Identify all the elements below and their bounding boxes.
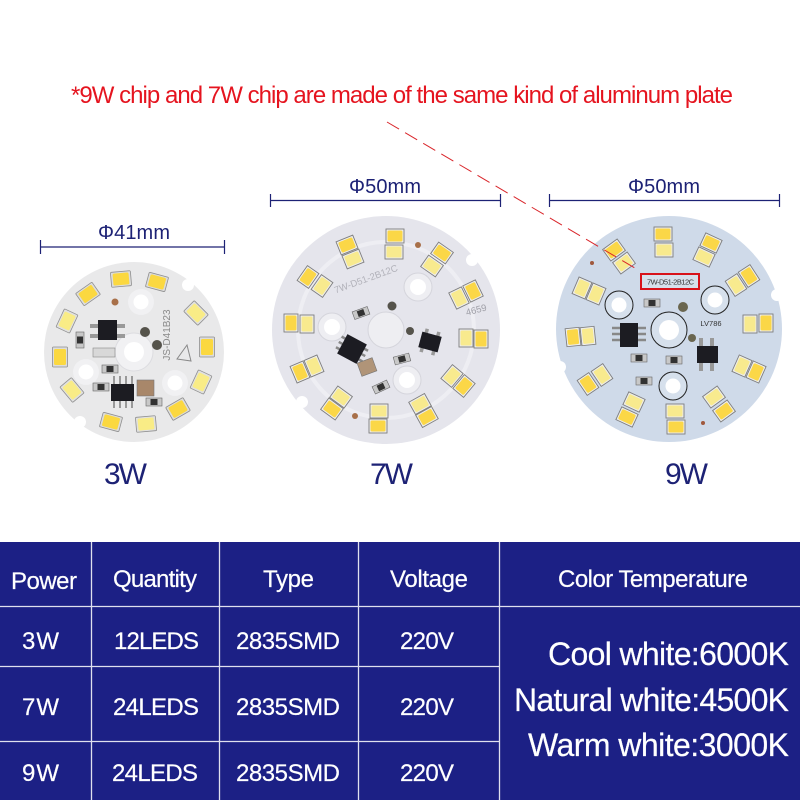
table row: 3W: 12LEDS	[114, 628, 199, 655]
dimension: 7W diameter	[270, 176, 500, 207]
dimension: 9W diameter: Φ50mm	[628, 176, 700, 198]
board: 3W: JS-D41B23	[162, 309, 173, 361]
board: 7W: 4659	[465, 303, 488, 319]
label: 9W: 9W	[665, 458, 709, 491]
table row: 7W: 2835SMD	[236, 694, 340, 721]
table row: 9W: 24LEDS	[112, 760, 198, 787]
callout: dashed leader line	[387, 122, 640, 271]
table row: 7W: 7W	[22, 694, 59, 721]
board: 9W: LV786	[700, 319, 722, 328]
table row: 3W: 3W	[22, 628, 59, 655]
table header row: Voltage	[390, 566, 468, 593]
table row: 3W	[22, 628, 454, 655]
table row: 9W: 9W	[22, 760, 59, 787]
board: 7W: 7W-D51-2B12C	[333, 263, 400, 296]
label: 7W: 7W	[370, 458, 414, 491]
board: 3W	[44, 262, 224, 442]
dimension: 3W diameter	[40, 222, 224, 254]
color temperature values: Cool white:6000K	[548, 636, 789, 672]
table row: 9W	[22, 760, 454, 787]
table header row: Power	[11, 568, 77, 595]
specification table	[0, 542, 800, 800]
table header row: Type	[263, 566, 314, 593]
title: *9W chip and 7W chip are made of the same kind of aluminum plate	[71, 82, 733, 109]
label: 3W: 3W	[104, 458, 148, 491]
dimension: 3W diameter: Φ41mm	[98, 222, 170, 244]
color temperature values: Natural white:4500K	[514, 682, 789, 718]
color temperature values: Warm white:3000K	[528, 727, 789, 763]
table row: 3W: 220V	[400, 628, 454, 655]
table row: 7W: 24LEDS	[113, 694, 199, 721]
table header row: Quantity	[113, 566, 197, 593]
table header row: Color Temperature	[558, 566, 748, 593]
table row: 9W: 220V	[400, 760, 454, 787]
table row: 9W: 2835SMD	[236, 760, 340, 787]
table row: 7W	[22, 694, 454, 721]
callout: red part-number box	[641, 274, 699, 289]
color temperature values	[514, 636, 789, 763]
board: 7W	[272, 216, 500, 444]
table header row	[11, 566, 748, 595]
table row: 7W: 220V	[400, 694, 454, 721]
dimension: 9W diameter	[550, 176, 780, 207]
board: 9W	[554, 216, 783, 442]
table row: 3W: 2835SMD	[236, 628, 340, 655]
callout: red part-number box: 7W-D51-2B12C	[647, 278, 695, 286]
dimension: 7W diameter: Φ50mm	[349, 176, 421, 198]
